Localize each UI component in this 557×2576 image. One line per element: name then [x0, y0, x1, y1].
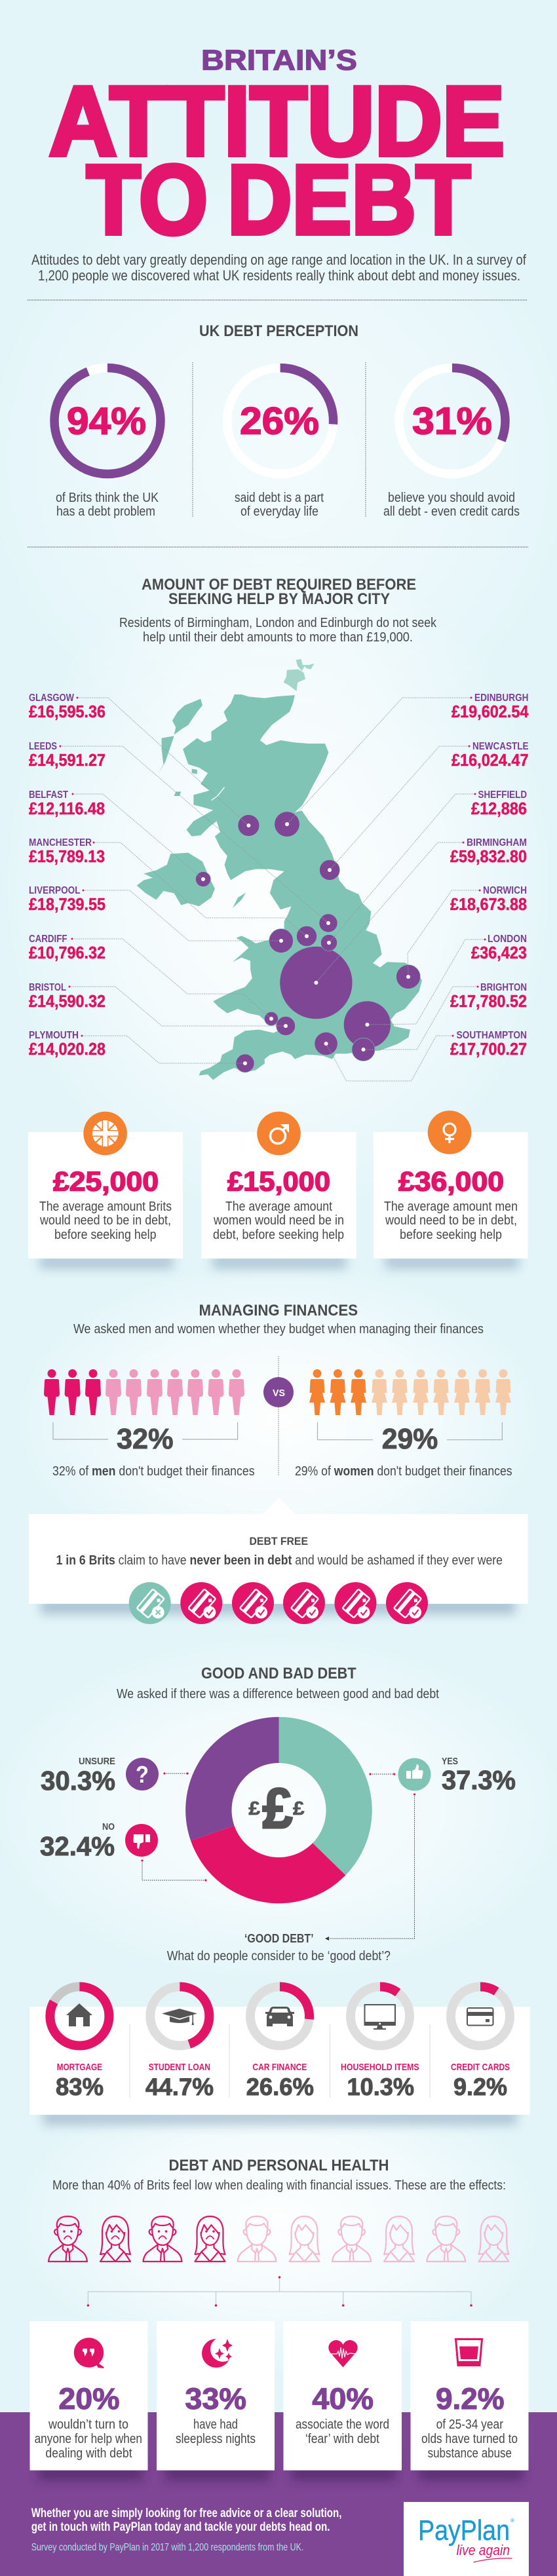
icon: mortarboard	[162, 2009, 197, 2025]
logo: PayPlan: live again	[456, 2542, 510, 2558]
icon: pound signs	[248, 1777, 304, 1840]
icon row: credit cards	[129, 1582, 428, 1624]
panel: average debt cards	[28, 1110, 528, 1269]
sub text: We asked men and women whether they budget when managing their finances	[73, 1322, 484, 1336]
stat: yes: 37.3%	[442, 1765, 516, 1795]
item: student loan: STUDENT LOAN	[149, 2062, 210, 2073]
men pictogram	[44, 1369, 244, 1415]
stat: unsure: ?	[136, 1761, 149, 1788]
city labels right: NORWICH	[483, 885, 527, 896]
title block	[49, 45, 505, 254]
panel: purple footer band	[0, 2412, 557, 2576]
card: 40%	[283, 2321, 402, 2471]
stat: unsure	[41, 1756, 189, 1796]
city labels left	[29, 692, 106, 1059]
icon: female symbol	[428, 1110, 471, 1154]
panel: debt free	[29, 1498, 528, 1624]
item: mortgage: 83%	[56, 2074, 104, 2100]
heading: amount of debt	[142, 576, 416, 608]
card: 20%: wouldn’t turn to	[48, 2417, 128, 2432]
caption 94%: of Brits think the UK	[56, 491, 159, 505]
people icons	[48, 2216, 509, 2262]
heading: MANAGING FINANCES	[199, 1302, 358, 1319]
icon: moon and stars	[202, 2337, 235, 2368]
city labels right: NEWCASTLE	[472, 741, 529, 752]
city labels right: £12,886	[471, 800, 527, 818]
city labels right: £36,423	[471, 944, 527, 962]
city labels right: £59,832.80	[450, 848, 527, 866]
card: Brits: would need to be in debt,	[39, 1213, 171, 1228]
panel: UK debt perception	[54, 322, 520, 519]
icon: male symbol	[257, 1112, 301, 1155]
logo: PayPlan: PayPlan	[418, 2514, 510, 2547]
card: Brits: before seeking help	[54, 1228, 156, 1242]
city labels left: £18,739.55	[29, 896, 106, 914]
icon: UK flag	[83, 1112, 127, 1155]
card: 9.2%: olds have turned to	[421, 2432, 518, 2446]
caption 31%: all debt - even credit cards	[383, 504, 520, 519]
city labels left: MANCHESTER	[29, 837, 92, 848]
sub text: amount of debt	[119, 616, 437, 645]
item: student loan: 44.7%	[145, 2074, 214, 2100]
stat: unsure: 30.3%	[41, 1766, 115, 1796]
call to action	[31, 2507, 341, 2534]
item: household items	[341, 1986, 419, 2100]
item: mortgage	[50, 1986, 109, 2100]
heading: DEBT FREE	[249, 1535, 308, 1547]
city labels left: £14,591.27	[29, 751, 106, 770]
icon: car	[265, 2007, 294, 2026]
item: car finance	[246, 1986, 314, 2100]
footer	[31, 2502, 529, 2576]
icon: pound signs: £	[248, 1798, 260, 1819]
sub text: amount of debt: Residents of Birmingham, London and Edinburgh do not seek	[119, 616, 437, 630]
stat: no: NO	[102, 1821, 115, 1832]
caption 26%: of everyday life	[240, 504, 318, 519]
connector tree	[87, 2276, 472, 2307]
item: credit cards: CREDIT CARDS	[451, 2062, 510, 2073]
caption 26%	[235, 491, 324, 519]
card: men	[374, 1110, 528, 1259]
card: 33%: sleepless nights	[176, 2432, 256, 2446]
heading: GOOD AND BAD DEBT	[201, 1665, 356, 1682]
city labels right: SOUTHAMPTON	[456, 1030, 527, 1041]
item: credit cards	[451, 1986, 510, 2100]
city labels left: BELFAST	[29, 789, 68, 801]
title: Britain's: BRITAIN’S	[201, 45, 357, 76]
icon: house	[66, 2003, 92, 2026]
item: car finance: 26.6%	[246, 2074, 314, 2100]
card: women: debt, before seeking help	[213, 1228, 344, 1242]
city labels left: CARDIFF	[29, 934, 67, 945]
city labels left: £12,116.48	[29, 800, 105, 818]
icon: pound signs: £	[262, 1777, 292, 1840]
city labels right: £19,602.54	[451, 703, 529, 721]
stat: no	[40, 1821, 207, 1882]
donut 94%: 94%	[67, 400, 146, 443]
donut chart	[185, 1717, 372, 1903]
sub text: amount of debt: help until their debt amounts to more than £19,000.	[143, 630, 413, 645]
item: car finance: CAR FINANCE	[252, 2062, 307, 2073]
caption 94%	[56, 491, 159, 519]
bracket: 29%	[317, 1422, 502, 1455]
item: credit cards: 9.2%	[453, 2074, 507, 2100]
icon: monitor	[364, 2004, 396, 2030]
card: 9.2%: 9.2%	[436, 2382, 505, 2415]
caption: men: 32% of men don't budget their finances	[52, 1464, 255, 1479]
item: mortgage: MORTGAGE	[57, 2062, 102, 2073]
sub text: We asked if there was a difference between good and bad debt	[117, 1687, 439, 1701]
card: women: £15,000	[227, 1166, 330, 1196]
city labels left: BRISTOL	[29, 982, 66, 993]
logo: PayPlan	[404, 2502, 529, 2576]
city labels left: PLYMOUTH	[29, 1030, 79, 1041]
city circles	[195, 812, 420, 1072]
card: 40%: ‘fear’ with debt	[305, 2432, 379, 2446]
card: men: The average amount men	[384, 1200, 518, 1214]
heading: DEBT AND PERSONAL HEALTH	[169, 2157, 389, 2174]
caption 31%: believe you should avoid	[388, 491, 515, 505]
city labels left: LEEDS	[29, 741, 57, 752]
card: 20%	[30, 2321, 148, 2471]
card: 33%	[157, 2321, 275, 2471]
women pictogram	[309, 1369, 511, 1415]
donut 31%: 31%	[412, 400, 492, 443]
city labels left: £14,590.32	[29, 993, 106, 1011]
icon: pound signs: £	[293, 1798, 304, 1819]
city labels left: LIVERPOOL	[29, 885, 81, 896]
call to action: Whether you are simply looking for free advice or a clear solution,	[31, 2507, 341, 2520]
card: men: before seeking help	[400, 1228, 502, 1242]
card: 9.2%	[410, 2321, 528, 2471]
card: 20%: anyone for help when	[35, 2432, 142, 2446]
stat: no: 32.4%	[40, 1831, 115, 1861]
title: To: TO	[86, 144, 208, 254]
item: household items: HOUSEHOLD ITEMS	[341, 2062, 419, 2073]
intro text	[31, 252, 527, 284]
city labels left: GLASGOW	[29, 692, 75, 704]
stat: unsure: UNSURE	[79, 1756, 115, 1767]
card: 33%: have had	[193, 2417, 238, 2432]
city labels right: BRIGHTON	[480, 982, 527, 993]
city labels right: LONDON	[488, 934, 527, 945]
card: women: The average amount	[225, 1200, 332, 1214]
vs badge	[263, 1377, 294, 1407]
statement: 1 in 6 Brits claim to have never been in debt and would be ashamed if they ever were	[56, 1553, 503, 1568]
icon: credit card	[467, 2008, 493, 2026]
sub text: What do people consider to be ‘good debt’?	[167, 1949, 391, 1963]
caption 31%	[383, 491, 520, 519]
city labels right: SHEFFIELD	[478, 789, 527, 801]
card: 9.2%: substance abuse	[428, 2446, 512, 2461]
card: men: £36,000	[398, 1166, 504, 1196]
heading: amount of debt: AMOUNT OF DEBT REQUIRED BEFORE	[142, 576, 416, 594]
donut 94%	[54, 368, 161, 474]
card: 33%: 33%	[185, 2382, 246, 2415]
city labels right: £17,700.27	[450, 1040, 527, 1059]
card: women: women would need be in	[213, 1213, 344, 1228]
bracket: 32%: 32%	[117, 1423, 173, 1455]
city labels right: EDINBURGH	[474, 692, 528, 704]
card: Brits: £25,000	[53, 1166, 159, 1196]
logo: PayPlan: ®	[510, 2518, 514, 2524]
map of UK	[59, 659, 486, 1081]
panel: good debt	[29, 1932, 530, 2125]
city labels left: £16,595.36	[29, 703, 106, 721]
bracket: 32%	[53, 1422, 238, 1455]
stat: yes	[325, 1756, 516, 1941]
icon: glass	[456, 2339, 482, 2366]
heading: ‘GOOD DEBT’	[244, 1932, 314, 1945]
panel: managing finances	[44, 1302, 512, 1479]
card: men: would need to be in debt,	[385, 1213, 517, 1228]
item: student loan	[145, 1986, 214, 2100]
city labels right: £18,673.88	[450, 896, 527, 914]
bracket: 29%: 29%	[382, 1423, 438, 1455]
heading: amount of debt: SEEKING HELP BY MAJOR CITY	[168, 590, 390, 608]
city labels right: £16,024.47	[451, 751, 528, 770]
card: 40%: 40%	[312, 2382, 374, 2415]
panel: good and bad debt	[40, 1665, 516, 1941]
caption 94%: has a debt problem	[56, 504, 155, 519]
city labels left: £14,020.28	[29, 1040, 106, 1059]
caption 26%: said debt is a part	[235, 491, 324, 505]
vs badge: VS	[273, 1388, 285, 1399]
card: 20%: dealing with debt	[45, 2446, 132, 2461]
card: women	[201, 1112, 356, 1259]
caption: women: 29% of women don't budget their finances	[295, 1464, 512, 1479]
item: household items: 10.3%	[347, 2074, 414, 2100]
city labels right	[450, 692, 529, 1059]
city labels right: £17,780.52	[450, 993, 527, 1011]
donut 26%	[227, 368, 334, 474]
card: Brits: The average amount Brits	[39, 1200, 172, 1214]
donut 31%	[399, 368, 505, 474]
title: Debt: DEBT	[227, 144, 471, 254]
leader lines	[60, 698, 485, 1081]
survey note: Survey conducted by PayPlan in 2017 with 1,200 respondents from the UK.	[31, 2542, 303, 2553]
sub text: More than 40% of Brits feel low when dealing with financial issues. These are the effects:	[52, 2178, 506, 2193]
card: 40%: associate the word	[296, 2417, 389, 2432]
city labels left: £10,796.32	[29, 944, 106, 962]
card: 9.2%: of 25-34 year	[436, 2417, 503, 2432]
heading: UK DEBT PERCEPTION	[199, 322, 358, 340]
title: Attitude: ATTITUDE	[49, 66, 505, 176]
stat: yes: YES	[442, 1756, 458, 1767]
icon: speech bubble	[74, 2338, 104, 2368]
icon: heart with pulse	[328, 2340, 358, 2368]
call to action: get in touch with PayPlan today and tackle your debts head on.	[31, 2520, 330, 2534]
panel: debt and personal health	[30, 2157, 528, 2480]
card: Brits	[28, 1112, 183, 1259]
card: 20%: 20%	[58, 2382, 120, 2415]
city labels right: BIRMINGHAM	[467, 837, 527, 848]
donut 26%: 26%	[240, 400, 319, 443]
city labels left: £15,789.13	[29, 848, 105, 866]
